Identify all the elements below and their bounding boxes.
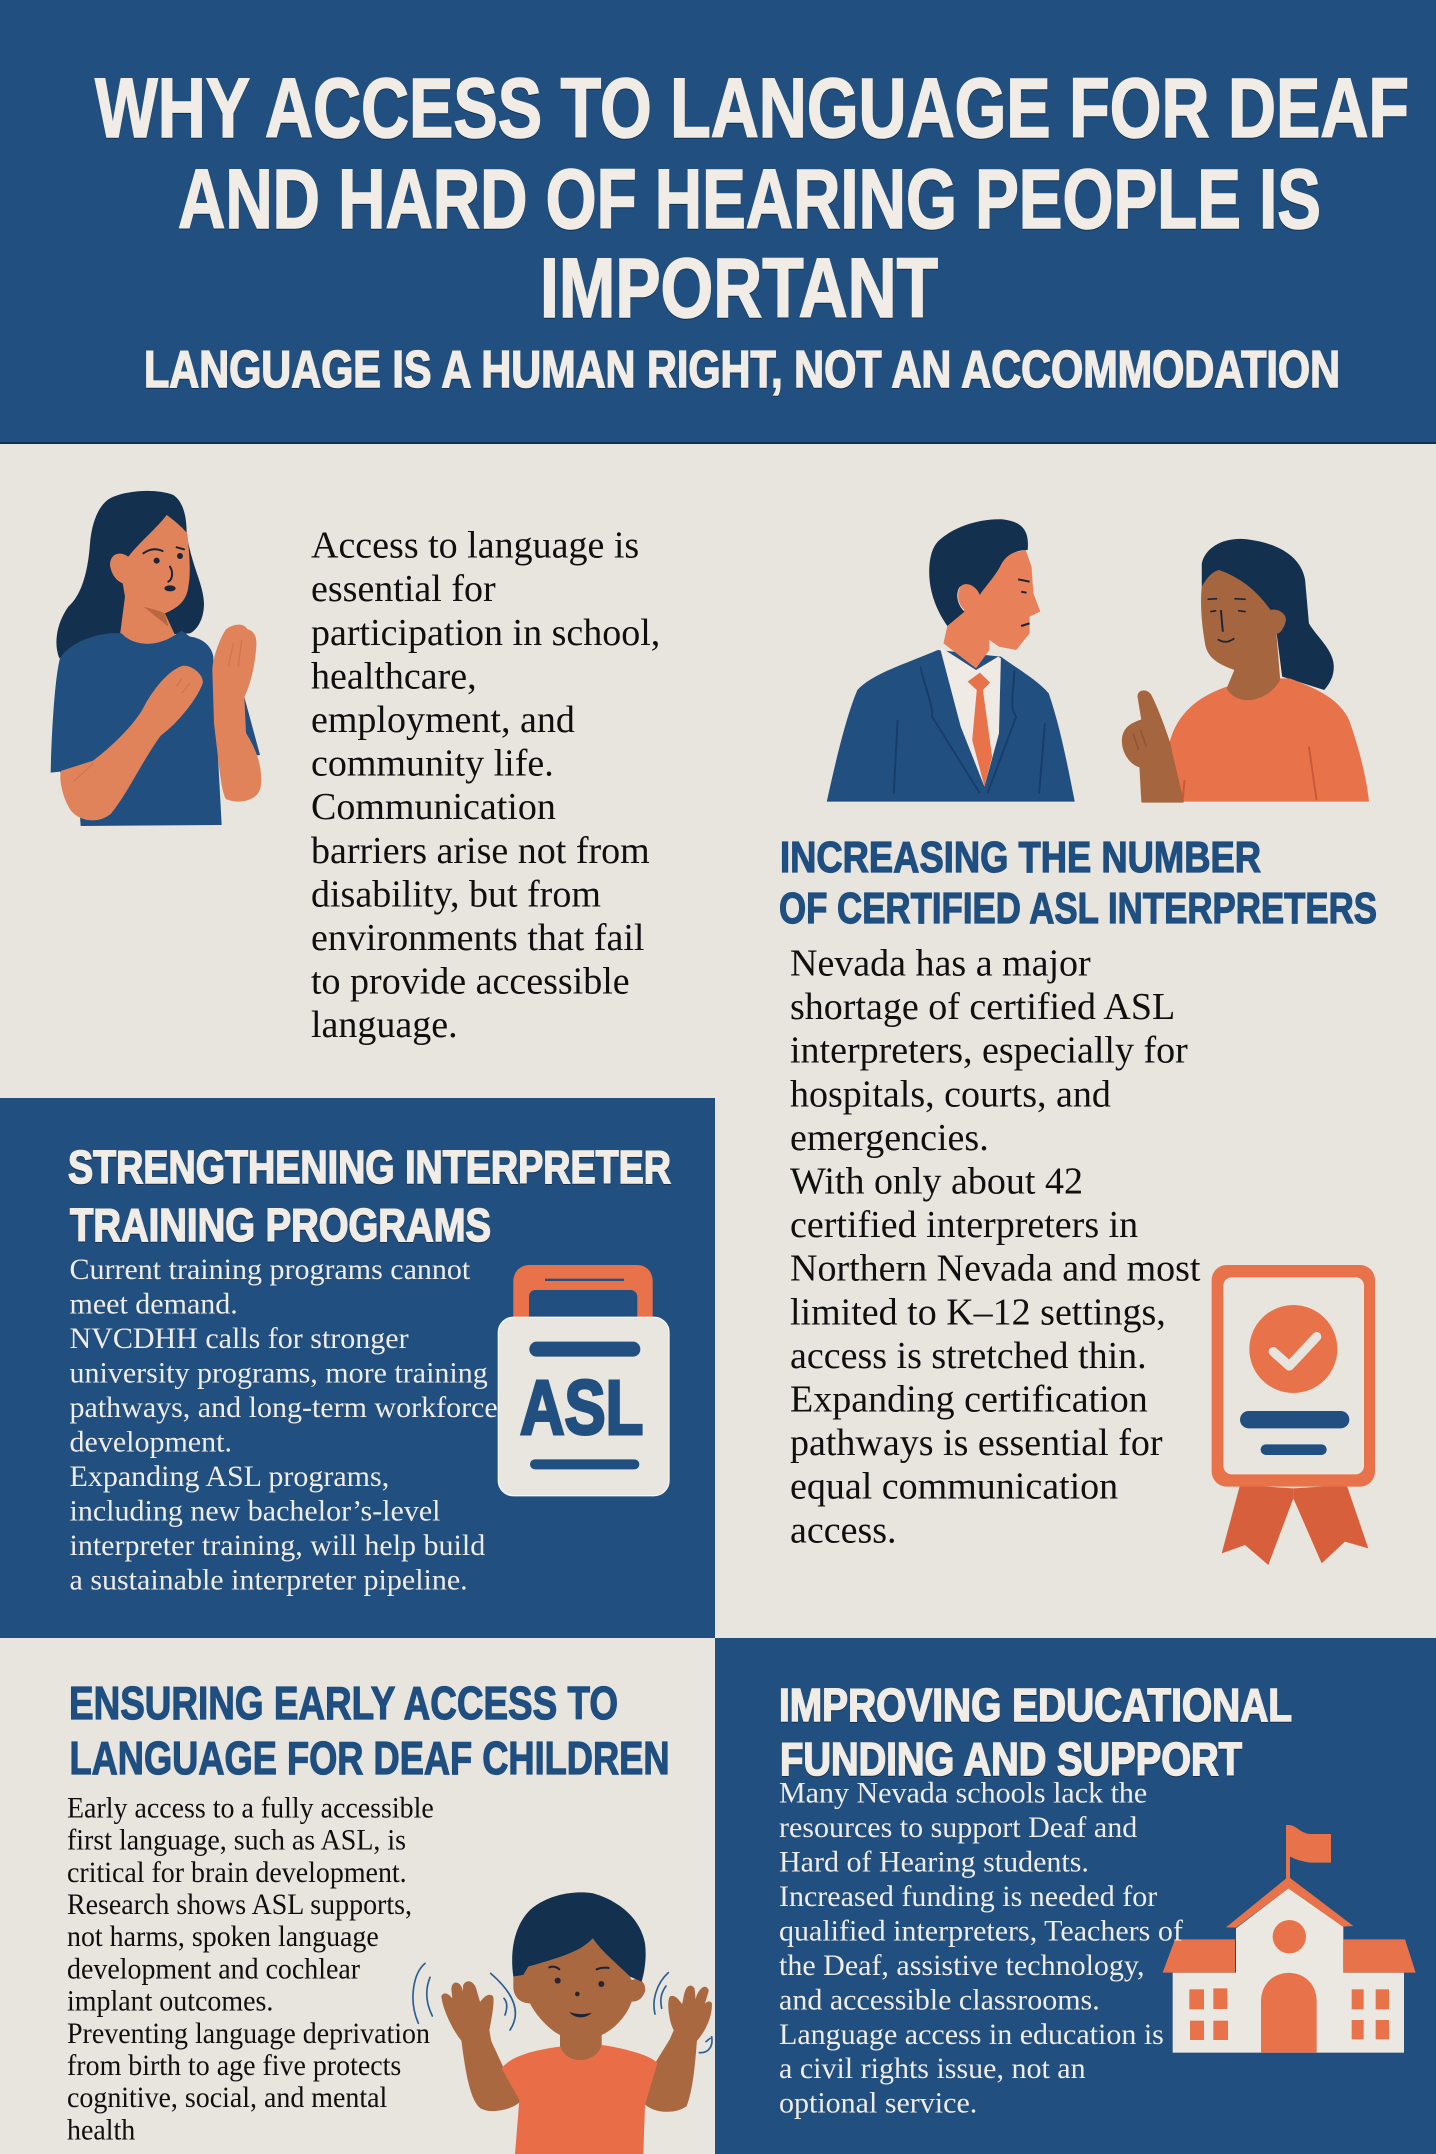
text: early access paragraph: critical for brain development. xyxy=(67,1857,407,1889)
heading xyxy=(69,1677,670,1784)
icon: school building with flag xyxy=(1163,1825,1416,2053)
panel: strengthening interpreter training xyxy=(0,1098,715,1638)
header banner xyxy=(0,0,1436,444)
heading: IMPROVING EDUCATIONAL xyxy=(779,1679,1292,1731)
text: interpreter shortage paragraph: pathways is essential for xyxy=(790,1422,1163,1464)
text: intro paragraph: healthcare, xyxy=(311,655,477,697)
text: early access paragraph: Preventing language deprivation xyxy=(67,2018,430,2050)
heading: STRENGTHENING INTERPRETER xyxy=(68,1141,671,1193)
panel: access to language intro xyxy=(51,491,670,1046)
text: funding paragraph: Many Nevada schools lack the xyxy=(779,1777,1147,1810)
text: early access paragraph: Research shows ASL supports, xyxy=(67,1889,412,1921)
title xyxy=(95,61,1409,335)
text: training paragraph: including new bachelor’s-level xyxy=(70,1494,440,1528)
heading xyxy=(779,1679,1292,1785)
heading: LANGUAGE FOR DEAF CHILDREN xyxy=(70,1732,670,1784)
text: interpreter shortage paragraph: access is stretched thin. xyxy=(790,1335,1147,1377)
text: funding paragraph: optional service. xyxy=(779,2087,977,2120)
text: interpreter shortage paragraph: Expanding certification xyxy=(790,1378,1148,1420)
heading xyxy=(779,833,1377,933)
text: funding paragraph: resources to support Deaf and xyxy=(779,1811,1137,1844)
text: interpreter shortage paragraph: emergencies. xyxy=(790,1117,989,1159)
text: intro paragraph: barriers arise not from xyxy=(311,830,650,872)
text: intro paragraph: Access to language is xyxy=(311,525,639,567)
text: early access paragraph: health xyxy=(67,2115,135,2147)
text: training paragraph: Current training programs cannot xyxy=(70,1253,471,1286)
panel: educational funding and support xyxy=(715,1638,1436,2154)
text: early access paragraph: not harms, spoken language xyxy=(67,1922,379,1953)
text: training paragraph: meet demand. xyxy=(70,1288,238,1320)
text: early access paragraph: cognitive, social, and mental xyxy=(67,2083,387,2114)
text: intro paragraph: to provide accessible xyxy=(311,961,630,1003)
text: training paragraph: development. xyxy=(70,1426,232,1458)
text: funding paragraph: Hard of Hearing students. xyxy=(779,1846,1089,1879)
icon: man and woman in conversation xyxy=(827,519,1369,802)
text: intro paragraph: essential for xyxy=(311,568,496,610)
text: interpreter shortage paragraph: Nevada has a major xyxy=(790,942,1091,984)
text: early access paragraph: implant outcomes. xyxy=(67,1986,273,2018)
text: funding paragraph: qualified interpreters, Teachers of xyxy=(779,1914,1183,1947)
panel: increasing certified interpreters xyxy=(779,519,1377,1565)
text: early access paragraph: development and cochlear xyxy=(67,1954,361,1986)
text: funding paragraph: Language access in education is xyxy=(779,2018,1164,2051)
text: funding paragraph: the Deaf, assistive technology, xyxy=(779,1949,1144,1982)
text: training paragraph: Expanding ASL programs, xyxy=(70,1460,389,1493)
icon: woman signing xyxy=(51,491,260,826)
text: intro paragraph: Communication xyxy=(311,786,556,828)
heading: TRAINING PROGRAMS xyxy=(70,1199,491,1251)
text: training paragraph: NVCDHH calls for stronger xyxy=(70,1322,409,1355)
text: training paragraph: a sustainable interpreter pipeline. xyxy=(70,1564,468,1596)
icon: ASL book card: ASL xyxy=(520,1365,643,1451)
heading: ENSURING EARLY ACCESS TO xyxy=(69,1677,618,1729)
text: interpreter shortage paragraph: limited to K–12 settings, xyxy=(790,1291,1166,1333)
text: intro paragraph: community life. xyxy=(311,743,554,785)
text: intro paragraph: disability, but from xyxy=(311,873,601,915)
text: interpreter shortage paragraph: interpreters, especially for xyxy=(790,1030,1188,1072)
text: intro paragraph: environments that fail xyxy=(311,917,644,959)
heading: FUNDING AND SUPPORT xyxy=(780,1733,1242,1785)
text: early access paragraph: from birth to age five protects xyxy=(67,2050,401,2082)
text: interpreter shortage paragraph: shortage of certified ASL xyxy=(790,986,1174,1028)
text: early access paragraph: first language, such as ASL, is xyxy=(67,1825,406,1857)
text: interpreter shortage paragraph: certified interpreters in xyxy=(790,1204,1138,1246)
icon: certificate with ribbon xyxy=(1212,1265,1375,1565)
text: interpreter shortage paragraph: Northern Nevada and most xyxy=(790,1248,1201,1290)
icon: child signing with raised hands xyxy=(413,1892,712,2154)
icon: ASL book card xyxy=(498,1265,669,1496)
text: intro paragraph: language. xyxy=(311,1004,458,1046)
text: interpreter shortage paragraph: equal communication xyxy=(790,1466,1118,1508)
text: interpreter shortage paragraph: With only about 42 xyxy=(790,1160,1083,1202)
text: intro paragraph: employment, and xyxy=(311,699,575,741)
text: funding paragraph: Increased funding is needed for xyxy=(779,1880,1157,1913)
text: interpreter shortage paragraph: hospitals, courts, and xyxy=(790,1073,1111,1115)
text: early access paragraph: Early access to a fully accessible xyxy=(67,1793,434,1825)
text: training paragraph: university programs, more training xyxy=(70,1356,488,1390)
heading: INCREASING THE NUMBER xyxy=(780,833,1261,882)
text: funding paragraph: a civil rights issue, not an xyxy=(779,2052,1086,2085)
text: training paragraph: pathways, and long-term workforce xyxy=(70,1391,498,1424)
panel: early access for deaf children xyxy=(67,1677,712,2154)
text: funding paragraph: and accessible classrooms. xyxy=(779,1983,1100,2016)
text: interpreter shortage paragraph: access. xyxy=(790,1509,897,1551)
heading xyxy=(68,1141,671,1251)
text: training paragraph: interpreter training, will help build xyxy=(70,1529,485,1562)
title: IMPORTANT xyxy=(540,241,938,335)
text: intro paragraph: participation in school, xyxy=(311,612,660,654)
